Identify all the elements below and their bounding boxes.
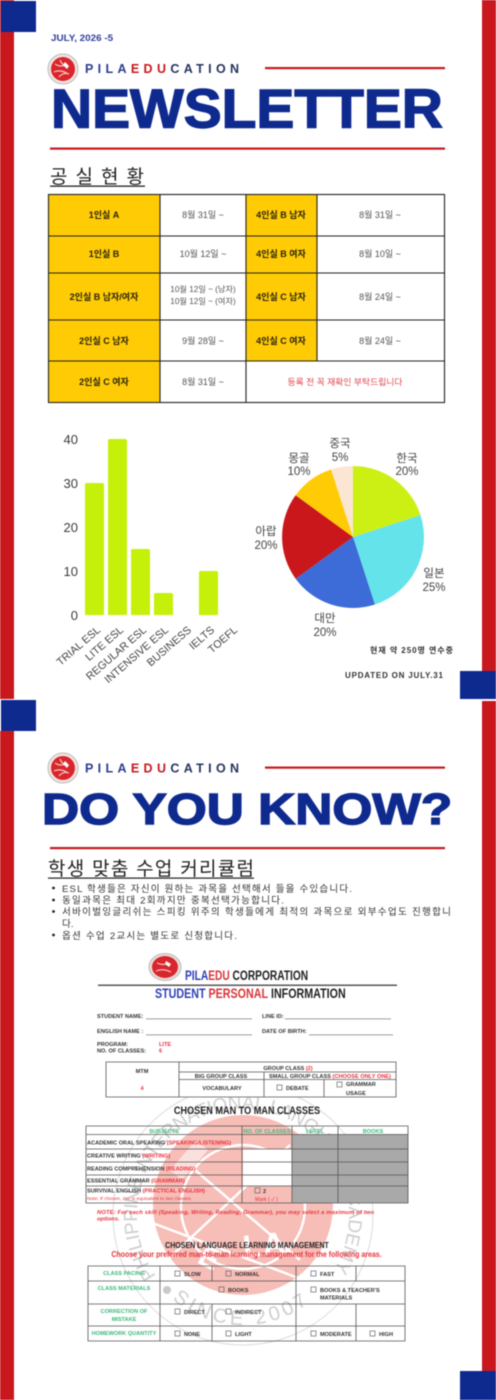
availability dates: 8월 10일 ~: [359, 248, 401, 259]
pie labels: [254, 438, 446, 639]
header rule bottom: [265, 766, 445, 769]
room names: 2인실 C 여자: [79, 376, 130, 387]
learning management table: LIGHT: [235, 1332, 252, 1338]
pie labels: 5%: [332, 452, 348, 464]
form header: PILAEDU CORPORATION: [185, 967, 308, 983]
seal ring text: SINCE 2007: [174, 1290, 304, 1326]
red note: options.: [97, 1216, 120, 1222]
learning management table: SLOW: [184, 1272, 201, 1278]
learning management table: HIGH: [379, 1332, 393, 1338]
student fields: LITE: [159, 1042, 171, 1048]
room names: 4인실 B 여자: [256, 248, 307, 259]
availability dates: 9월 28일 ~: [182, 335, 224, 346]
room names: 4인실 C 남자: [256, 291, 307, 302]
watermark: academy seal: [112, 1097, 374, 1346]
heading: vacancy status: 공 실 현 황: [50, 166, 144, 188]
availability dates: 8월 31일 ~: [182, 209, 224, 220]
learning management heading: CHOSEN LANGUAGE LEARNING MANAGEMENT: [165, 1241, 329, 1250]
x axis labels: INTENSIVE ESL: [102, 624, 171, 686]
availability dates: 10월 12일 ~ (여자): [170, 296, 236, 306]
pie labels: 아랍: [255, 525, 277, 538]
group class table: USAGE: [346, 1091, 366, 1097]
brand wordmark bottom: PILAEDUCATION: [85, 762, 243, 776]
title: newsletter: NEWSLETTER: [51, 78, 443, 139]
pie labels: 20%: [313, 627, 337, 639]
group class table: [106, 1062, 396, 1097]
x axis labels: BUSINESS: [145, 624, 194, 669]
frame: bottom page: [0, 700, 496, 1400]
learning management table: INDIRECT: [235, 1310, 262, 1316]
bullet list: [52, 883, 451, 942]
seal red disc: E: [193, 1239, 226, 1278]
bullet list: 다.: [62, 919, 74, 930]
student fields: NO. OF CLASSES:: [97, 1048, 146, 1054]
date label: JULY, 2026 -5: [51, 33, 114, 44]
x axis labels: [55, 624, 240, 686]
y axis labels: 10: [64, 564, 78, 579]
man to man table: ACADEMIC ORAL SPEAKING (SPEAKING/LISTENING): [87, 1140, 231, 1146]
room names: 2인실 C 남자: [79, 335, 130, 346]
man to man table: 2: [263, 1189, 266, 1195]
man to man table: [86, 1126, 408, 1203]
availability dates: 10월 12일 ~ (남자): [170, 284, 236, 294]
student fields: LINE ID:: [262, 1014, 284, 1020]
room names: 4인실 B 남자: [256, 209, 307, 220]
learning management table: BOOKS: [228, 1288, 249, 1294]
group class table: DEBATE: [286, 1086, 309, 1092]
group class table: 4: [140, 1086, 144, 1092]
title rule bottom: [50, 847, 445, 849]
learning management table: [88, 1266, 405, 1341]
learning management table: FAST: [320, 1272, 335, 1278]
y axis labels: 40: [64, 432, 78, 447]
room names: 1인실 B: [89, 248, 120, 259]
room names: [70, 209, 307, 387]
pie labels: 중국: [329, 438, 351, 450]
heading: customised curriculum: 학생 맞춤 수업 커리큘럼: [48, 858, 254, 880]
seal red disc: [150, 1113, 335, 1297]
pie labels: 몽골: [288, 452, 310, 465]
bullet list: 옵션 수업 2교시는 별도로 신청합니다.: [62, 930, 237, 942]
group class table: BIG GROUP CLASS: [195, 1074, 247, 1080]
room names: 2인실 B 남자/여자: [70, 291, 139, 302]
red note: [97, 1210, 374, 1222]
logo: Pila Education top: [48, 54, 78, 84]
pie labels: 10%: [287, 466, 311, 478]
man to man table: READING COMPREHENSION (READING): [87, 1166, 196, 1172]
man to man table: Mark ( ✓ ): [255, 1196, 278, 1203]
y axis labels: 30: [64, 476, 78, 491]
title: do you know: DO YOU KNOW?: [42, 786, 452, 834]
pie chart: nationalities: [254, 438, 446, 639]
yellow label cells: [48, 194, 317, 403]
room names: 1인실 A: [89, 209, 120, 220]
man to man table: SUBJECTS: [149, 1129, 179, 1135]
x axis labels: TRIAL ESL: [55, 624, 103, 668]
availability dates: 8월 31일 ~: [182, 376, 224, 387]
seal ring text: PHILIPPINE INTERNATIONAL LANGUAGE ACADEMY: [124, 1097, 362, 1281]
pie labels: 한국: [396, 452, 418, 465]
pie labels: 20%: [254, 540, 278, 552]
learning management table: NORMAL: [235, 1272, 260, 1278]
student fields: STUDENT NAME:: [97, 1014, 143, 1020]
table grid: [48, 194, 445, 403]
form white mask: [90, 1055, 410, 1098]
group class table: GROUP CLASS (2): [263, 1066, 313, 1072]
seal red disc: LA: [241, 1225, 287, 1265]
form: student personal information: [86, 954, 410, 1341]
group class table: VOCABULARY: [202, 1086, 242, 1092]
red note: NOTE: For each skill (Speaking, Writing, Reading, Grammar), you may select a maximum of two: [97, 1210, 374, 1216]
table: room vacancy: [48, 194, 445, 403]
learning management table: MODERATE: [320, 1332, 352, 1338]
learning management table: MISTAKE: [112, 1317, 137, 1323]
header rule: [265, 67, 445, 69]
bars: [85, 439, 218, 615]
y axis labels: [64, 432, 78, 623]
bullet list: 서바이벌잉글리쉬는 스피킹 위주의 학생들에게 최적의 과목으로 외부수업도 진행합니: [62, 906, 451, 918]
student fields: ENGLISH NAME :: [97, 1029, 143, 1035]
learning management table: CLASS PACING: [103, 1271, 145, 1277]
form logo: [149, 954, 181, 980]
form header: STUDENT PERSONAL INFORMATION: [155, 986, 346, 1001]
bullet list: 동일과목은 최대 2회까지만 중복선택가능합니다.: [62, 896, 284, 906]
red notice: 등록 전 꼭 재확인 부탁드립니다: [288, 376, 402, 387]
pie labels: 25%: [422, 582, 446, 594]
learning management table: CLASS MATERIALS: [98, 1286, 151, 1292]
note: current students: 현재 약 250명 연수중: [370, 645, 454, 655]
availability dates: [170, 209, 401, 387]
man to man table: Note: If chosen, 2cc is equivalent to two classes: [87, 1196, 191, 1202]
x axis labels: LITE ESL: [83, 624, 126, 664]
group class table: GRAMMAR: [346, 1082, 376, 1088]
note: update date: UPDATED ON JULY.31: [345, 671, 444, 680]
pie slices: [282, 466, 424, 608]
pie labels: 일본: [423, 566, 445, 580]
learning management table: MATERIALS: [320, 1296, 352, 1302]
pie labels: 20%: [395, 466, 419, 478]
room names: 4인실 C 여자: [256, 335, 307, 346]
learning management heading: [111, 1241, 382, 1259]
y axis labels: 0: [71, 608, 78, 623]
learning management heading: Choose your preferred man-to-man learning management for the following areas.: [111, 1249, 382, 1259]
learning management table: CORRECTION OF: [101, 1309, 148, 1315]
man to man table: LEVEL: [306, 1129, 325, 1135]
man to man table: CREATIVE WRITING (WRITING): [87, 1154, 170, 1160]
man to man table: BOOKS: [363, 1129, 384, 1135]
group class table: MTM: [136, 1069, 149, 1075]
man to man table: SURVIVAL ENGLISH (PRACTICAL ENGLISH): [87, 1188, 205, 1194]
title rule: [50, 148, 445, 150]
availability dates: 10월 12일 ~: [180, 248, 226, 259]
bar chart: students by course: [55, 432, 240, 686]
student fields: [97, 1014, 393, 1054]
brand wordmark top: PILAEDUCATION: [85, 62, 243, 76]
x axis labels: REGULAR ESL: [84, 624, 149, 683]
form header: [98, 954, 397, 1001]
student fields: DATE OF BIRTH:: [262, 1029, 307, 1035]
availability dates: 8월 24일 ~: [359, 291, 401, 302]
x axis labels: IELTS: [187, 624, 217, 652]
x axis labels: TOEFL: [206, 624, 240, 656]
student fields: PROGRAM:: [97, 1042, 128, 1048]
man to man table: ESSENTIAL GRAMMAR (GRAMMAR): [87, 1178, 185, 1184]
learning management table: BOOKS & TEACHER'S: [320, 1288, 380, 1294]
frame: top page: [0, 0, 496, 699]
logo: Pila Education bottom: [48, 753, 78, 783]
availability dates: 8월 31일 ~: [359, 209, 401, 220]
man to man heading: CHOSEN MAN TO MAN CLASSES: [174, 1105, 320, 1117]
group class table: SMALL GROUP CLASS (CHOOSE ONLY ONE): [269, 1074, 391, 1080]
man to man table: NO. OF CLASSES: [243, 1129, 291, 1135]
student fields: 6: [159, 1048, 162, 1054]
bullet list: ESL 학생들은 자신이 원하는 과목을 선택해서 들을 수있습니다.: [62, 883, 352, 895]
y axis labels: 20: [64, 520, 78, 535]
pie labels: 대만: [314, 612, 336, 625]
learning management table: DIRECT: [184, 1310, 205, 1316]
learning management table: HOMEWORK QUANTITY: [92, 1331, 157, 1337]
learning management table: NONE: [184, 1332, 200, 1338]
availability dates: 8월 24일 ~: [359, 335, 401, 346]
